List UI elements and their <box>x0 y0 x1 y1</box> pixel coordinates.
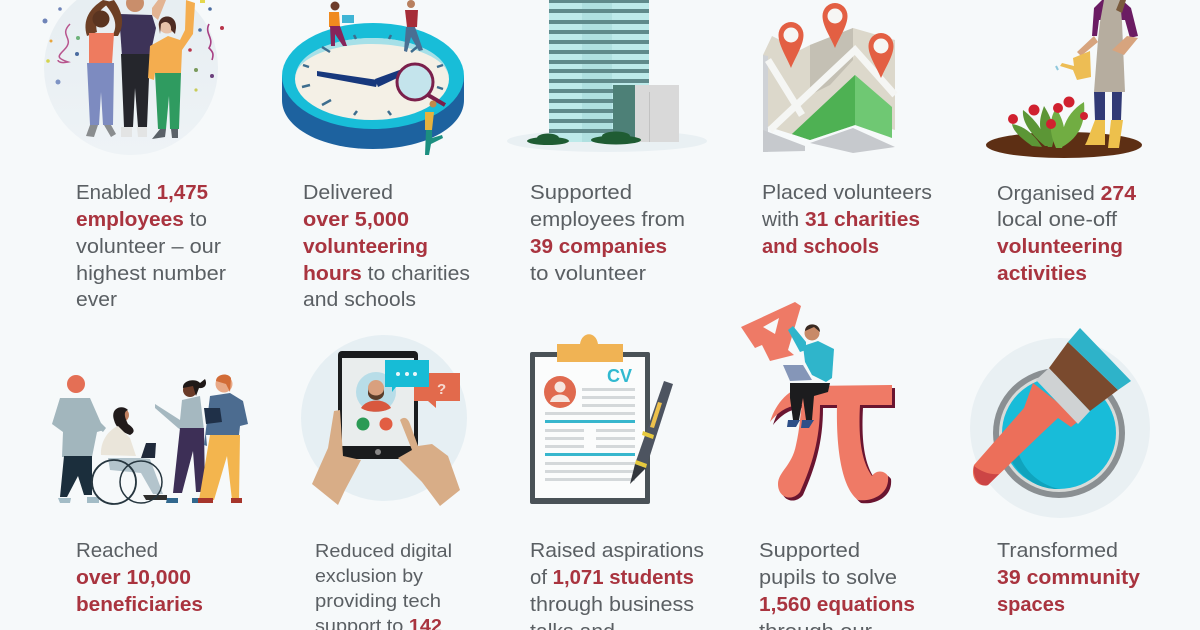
person: man in dark top <box>119 0 166 137</box>
text: equations <box>759 540 915 630</box>
paintbrush <box>973 328 1131 486</box>
text: companies: employees from <box>530 209 685 231</box>
text: companies <box>530 182 685 285</box>
text: companies: Supported <box>530 182 632 204</box>
text: raised aspirations <box>530 540 704 630</box>
text: one-off activities: local one-off <box>997 209 1117 231</box>
tablet <box>338 351 418 459</box>
text: volunteering hours <box>303 182 470 311</box>
text: one-off activities: activities <box>997 263 1087 285</box>
text: companies: to volunteer <box>530 263 646 285</box>
text: digital exclusion: Reduced digital <box>315 540 452 561</box>
person: woman in yellow sweater <box>148 0 195 139</box>
text: beneficiaries: Reached <box>76 540 158 562</box>
person sitting on clock <box>329 2 354 46</box>
text: charities and schools: and schools <box>762 236 879 258</box>
form lines <box>545 388 635 481</box>
text: enabled employees: volunteer – our <box>76 236 221 258</box>
text: volunteering hours: and schools <box>303 289 416 311</box>
pi symbol <box>770 385 895 503</box>
watering can <box>1056 51 1091 80</box>
text: one-off activities: Organised 274 <box>997 183 1137 205</box>
illustration: office tower <box>507 0 707 152</box>
illustration: celebrating volunteers with confetti <box>42 0 224 155</box>
bushes <box>527 132 641 145</box>
text: raised aspirations: Raised aspirations <box>530 540 704 562</box>
person: woman in orange top <box>85 0 122 137</box>
profile photo <box>544 376 576 408</box>
text: community spaces <box>997 540 1141 616</box>
person in wheelchair <box>92 407 167 504</box>
hands <box>312 410 460 506</box>
text: enabled employees: highest number <box>76 263 226 285</box>
text: digital exclusion: providing tech <box>315 590 441 611</box>
illustration: group with wheelchair user <box>52 374 248 504</box>
text: beneficiaries: over 10,000 <box>76 567 191 589</box>
text: community spaces: Transformed <box>997 540 1118 562</box>
text: raised aspirations: through business <box>530 594 694 616</box>
illustration: person sitting on pi with number 4 <box>741 302 895 503</box>
text: charities and schools: with 31 charities <box>761 209 920 231</box>
clock hands <box>317 68 410 87</box>
text: charities and schools: Placed volunteers <box>762 182 932 204</box>
text: volunteering hours: volunteering <box>303 236 428 258</box>
clipboard clip <box>557 334 623 362</box>
text: equations: Supported <box>759 540 860 562</box>
low block <box>613 85 679 142</box>
text: beneficiaries: beneficiaries <box>76 594 203 616</box>
person with laptop <box>783 324 834 428</box>
map pins <box>778 3 894 78</box>
flowers <box>1008 96 1088 148</box>
pen <box>630 381 673 484</box>
clock ticks <box>302 35 443 115</box>
illustration: giant clock with magnifying glass <box>282 0 464 155</box>
text: community spaces: 39 community <box>997 567 1141 589</box>
person climbing clock <box>425 100 443 155</box>
magnifying glass <box>397 64 445 105</box>
text: one-off activities <box>997 183 1137 285</box>
confetti <box>42 0 224 92</box>
text: charities and schools <box>761 182 932 258</box>
person standing on clock <box>404 0 423 52</box>
illustration: tablet video call held in hands <box>301 335 467 506</box>
illustration: paint tin and brush <box>970 328 1150 518</box>
text: digital exclusion: exclusion by <box>315 565 424 586</box>
illustration: map with pins <box>763 3 895 153</box>
text: enabled employees: employees to <box>76 209 207 231</box>
illustration: CV on clipboard with pen <box>530 334 673 504</box>
text: volunteering hours: over 5,000 <box>303 209 409 231</box>
CV heading: CV <box>607 366 632 386</box>
text: community spaces: spaces <box>997 594 1065 616</box>
text: one-off activities: volunteering <box>997 236 1123 258</box>
number 4 <box>741 302 801 361</box>
chat bubbles <box>385 360 460 408</box>
text: volunteering hours: hours to charities <box>303 263 470 285</box>
chat bubbles: ? <box>437 381 446 398</box>
text: digital exclusion <box>315 540 452 630</box>
gardener <box>1077 0 1138 148</box>
text: enabled employees: ever <box>76 289 117 311</box>
person in yellow trousers <box>198 374 248 503</box>
text: raised aspirations: of 1,071 students <box>530 567 694 589</box>
tower window bands <box>549 0 649 133</box>
text: enabled employees: Enabled 1,475 <box>76 182 208 204</box>
paint tin <box>993 368 1125 498</box>
illustration: gardener watering flowers <box>986 0 1142 158</box>
text: volunteering hours: Delivered <box>303 182 393 204</box>
person walking in grey sweater <box>52 375 106 503</box>
text: equations: pupils to solve <box>759 567 897 589</box>
text: equations: 1,560 equations <box>759 594 915 616</box>
text: beneficiaries <box>76 540 203 616</box>
person in purple trousers <box>155 379 206 503</box>
text: companies: 39 companies <box>530 236 667 258</box>
text: enabled employees <box>76 182 226 311</box>
